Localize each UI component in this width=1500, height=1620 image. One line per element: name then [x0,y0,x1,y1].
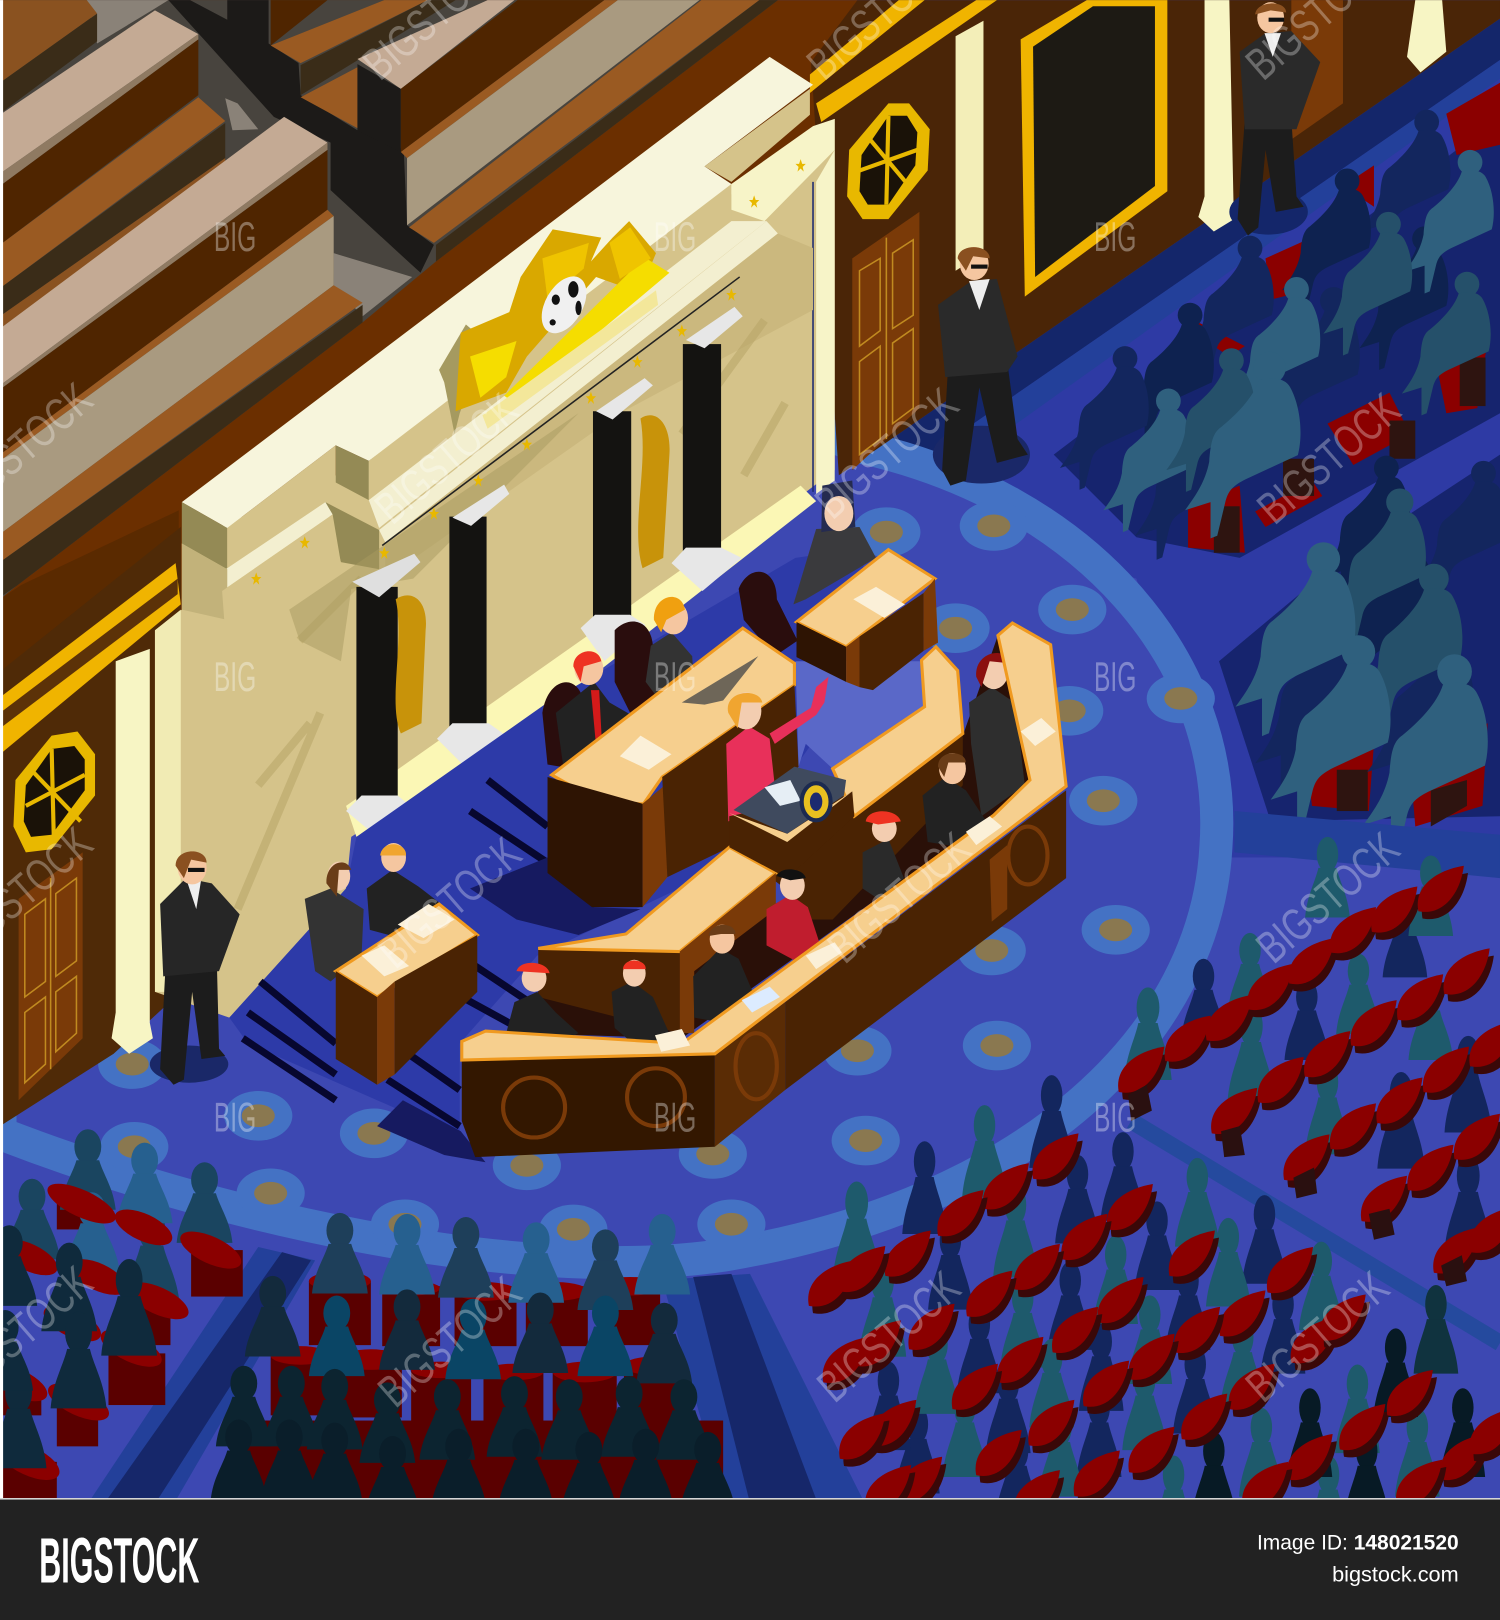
upper gallery wood [0,0,857,744]
wall column [1407,0,1446,72]
frame edge [0,0,3,1499]
figures front [0,1225,157,1468]
audience bottom left [0,1129,246,1499]
audience lower right teal [833,837,1458,1544]
audience lower right darkest [1192,1328,1485,1520]
seated man right [923,753,990,847]
woman at top desk [793,480,876,604]
stage ledge [346,486,816,837]
watermark: BIGSTOCK diagonals: BIGSTOCK [818,822,980,973]
wall shadow [289,413,579,661]
lower left desk [336,904,477,1085]
blue figures [64,1143,173,1273]
guard center [933,247,1030,486]
watermark: BIGSTOCK diagonals: BIGSTOCK [808,1261,970,1412]
seated person orange hair [612,960,671,1046]
carpet medallions [98,501,1215,1254]
rostrum wall cream [155,57,835,1018]
watermark: BIG labels: BIG [654,654,696,700]
watermark: BIG labels: BIG [654,214,696,260]
watermark: BIG labels: BIG [214,1094,256,1140]
seat supports group lower right [1128,1085,1467,1286]
black columns [346,307,743,837]
right woman in black [969,653,1025,816]
upper desk [548,628,799,907]
cornice top [182,57,813,528]
door with octagon window [847,103,930,470]
woman and man at lower left desk [305,843,455,981]
audience lower right dark [866,897,1492,1520]
back row mid blue figures [379,1214,690,1303]
watermark: BIG labels: BIG [1094,654,1136,700]
presenter in red [726,677,829,821]
red seats group lower right lower block [808,1133,1500,1523]
middle desk with arm and podium base [538,647,963,1033]
seat bases [1214,358,1486,827]
teal seated figures [1103,150,1494,855]
watermark: BIG labels: BIG [1094,1094,1136,1140]
front long desk [462,623,1066,1157]
footer bar: BIGSTOCK [39,1525,199,1597]
guard left [150,851,240,1085]
gold banners [396,415,670,734]
chamber chairs [542,572,798,770]
watermark: BIG labels: BIG [214,214,256,260]
blonde woman [646,597,694,703]
red seats bottom center [238,1272,723,1499]
large gold frame [1021,0,1167,297]
footer image id: Image ID: 148021520 [1257,1532,1459,1555]
watermark: BIGSTOCK diagonals: BIGSTOCK [1247,822,1409,973]
watermark: BIG labels: BIG [1094,214,1136,260]
left wall with door [0,527,181,1126]
desk shadows [377,858,640,1162]
guard top right [1229,2,1320,236]
watermark: BIGSTOCK diagonals: BIGSTOCK [1248,383,1410,534]
upper right seating floor [839,19,1500,858]
seat cushions [0,1176,246,1488]
watermark: BIGSTOCK diagonals: BIGSTOCK [368,827,531,978]
seat bases [0,1204,243,1499]
light floor between desks [795,661,935,769]
aisle band lower right [1131,1121,1500,1343]
seated man center [693,925,759,1023]
second row dark figures [245,1276,692,1383]
seated woman left black [506,963,579,1049]
stage steps [243,780,548,1126]
small upper desk [796,550,938,690]
watermark: BIGSTOCK diagonals: BIGSTOCK [805,378,968,528]
stage floor [229,548,868,1136]
benches top center [271,0,327,46]
second row teal figures [309,1296,633,1379]
right wall with doors and frames [810,0,1500,475]
footer site url: bigstock.com [1332,1562,1459,1587]
wall column [1198,0,1238,231]
watermark: BIGSTOCK diagonals: BIGSTOCK [1236,1261,1398,1412]
third row figures [216,1366,712,1463]
front row figures [211,1420,736,1517]
man with red tie [556,651,652,765]
lower floor aisles [91,1247,863,1499]
watermark: BIGSTOCK diagonals: BIGSTOCK [368,1267,531,1417]
benches left [0,0,97,83]
black aisle [168,0,434,273]
door top right [1291,0,1343,140]
watermark: BIG labels [214,214,1136,1140]
back row dark figures [312,1213,633,1310]
lectern with seal [733,767,846,834]
star garland [251,159,806,585]
gold crest [439,221,669,434]
recess behind front desk [517,635,1030,1038]
watermark: BIG labels: BIG [654,1094,696,1140]
footer bar [0,1498,1500,1620]
carpet: semicircular floor with ring [0,434,1217,1263]
watermark: BIGSTOCK diagonals: BIGSTOCK [365,383,527,534]
figures behind [4,1129,232,1305]
wall column [956,21,983,271]
aisle band right [1235,811,1500,878]
gray risers [87,0,168,43]
red seats group lower right upper block [1118,866,1500,1281]
audience bottom center [211,1213,736,1517]
upper right audience [1060,83,1500,855]
woman in red jacket [767,869,821,961]
dark seated figures [1060,110,1500,798]
lower cornice [369,221,767,528]
red seat accents [1188,83,1500,827]
seated red-haired woman [863,811,904,899]
watermark: BIG labels: BIG [214,654,256,700]
